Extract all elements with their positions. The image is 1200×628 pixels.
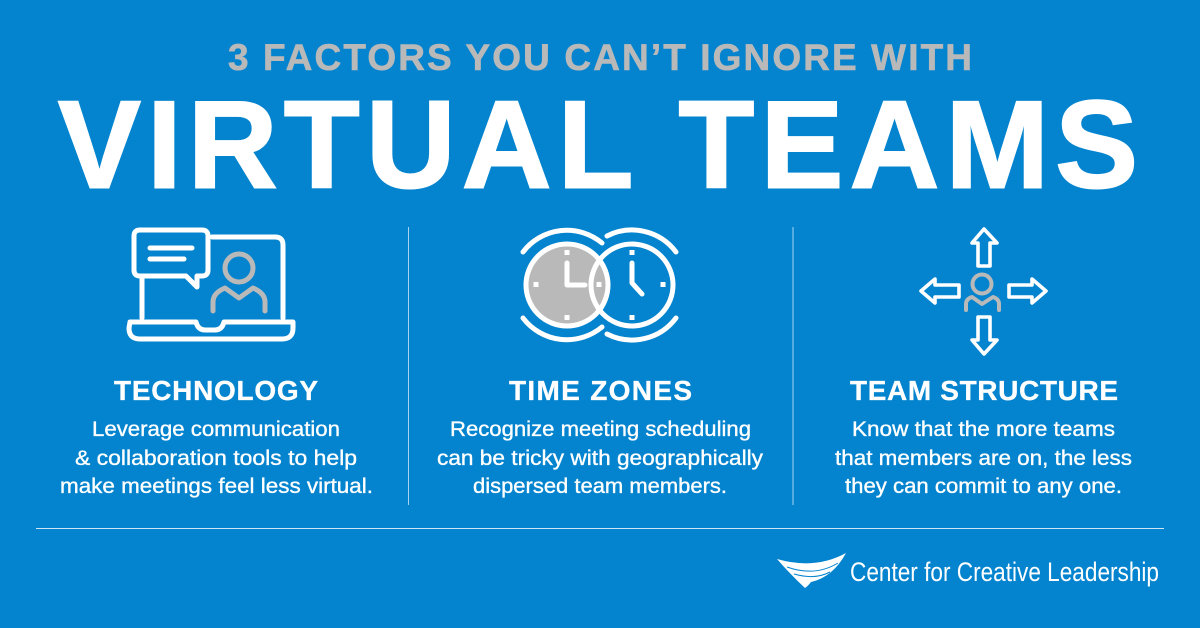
text block: time zones description: can be tricky with geographically — [437, 447, 764, 470]
panel: time zones — [437, 230, 764, 498]
icon: person with four outward arrows — [921, 229, 1046, 354]
heading: technology: TECHNOLOGY — [114, 375, 318, 406]
heading: time zones: TIME ZONES — [509, 375, 692, 406]
text block: technology description — [60, 418, 373, 498]
logo: Center for Creative Leadership — [777, 553, 1159, 588]
text block: time zones description: dispersed team members. — [473, 475, 727, 498]
text block: technology description: make meetings feel less virtual. — [60, 475, 373, 498]
text block: time zones description — [437, 418, 764, 498]
text block: team structure description: they can commit to any one. — [845, 475, 1122, 498]
text block: technology description: Leverage communication — [92, 418, 340, 441]
title: kicker line: 3 FACTORS YOU CAN’T IGNORE WITH — [228, 37, 972, 78]
title: main heading: VIRTUAL TEAMS — [58, 76, 1138, 214]
icon: laptop with chat bubble and person — [129, 230, 293, 339]
icon: two overlapping clocks — [523, 230, 676, 340]
text block: technology description: & collaboration tools to help — [75, 447, 357, 470]
heading: team structure: TEAM STRUCTURE — [850, 375, 1118, 406]
text block: team structure description: that members are on, the less — [835, 447, 1132, 470]
text block: team structure description: Know that the more teams — [852, 418, 1115, 441]
panel: team structure — [835, 229, 1132, 498]
panel: technology — [60, 230, 373, 498]
text block: time zones description: Recognize meeting scheduling — [450, 418, 751, 441]
icon: wing mark — [777, 553, 846, 588]
text block: team structure description — [835, 418, 1132, 498]
